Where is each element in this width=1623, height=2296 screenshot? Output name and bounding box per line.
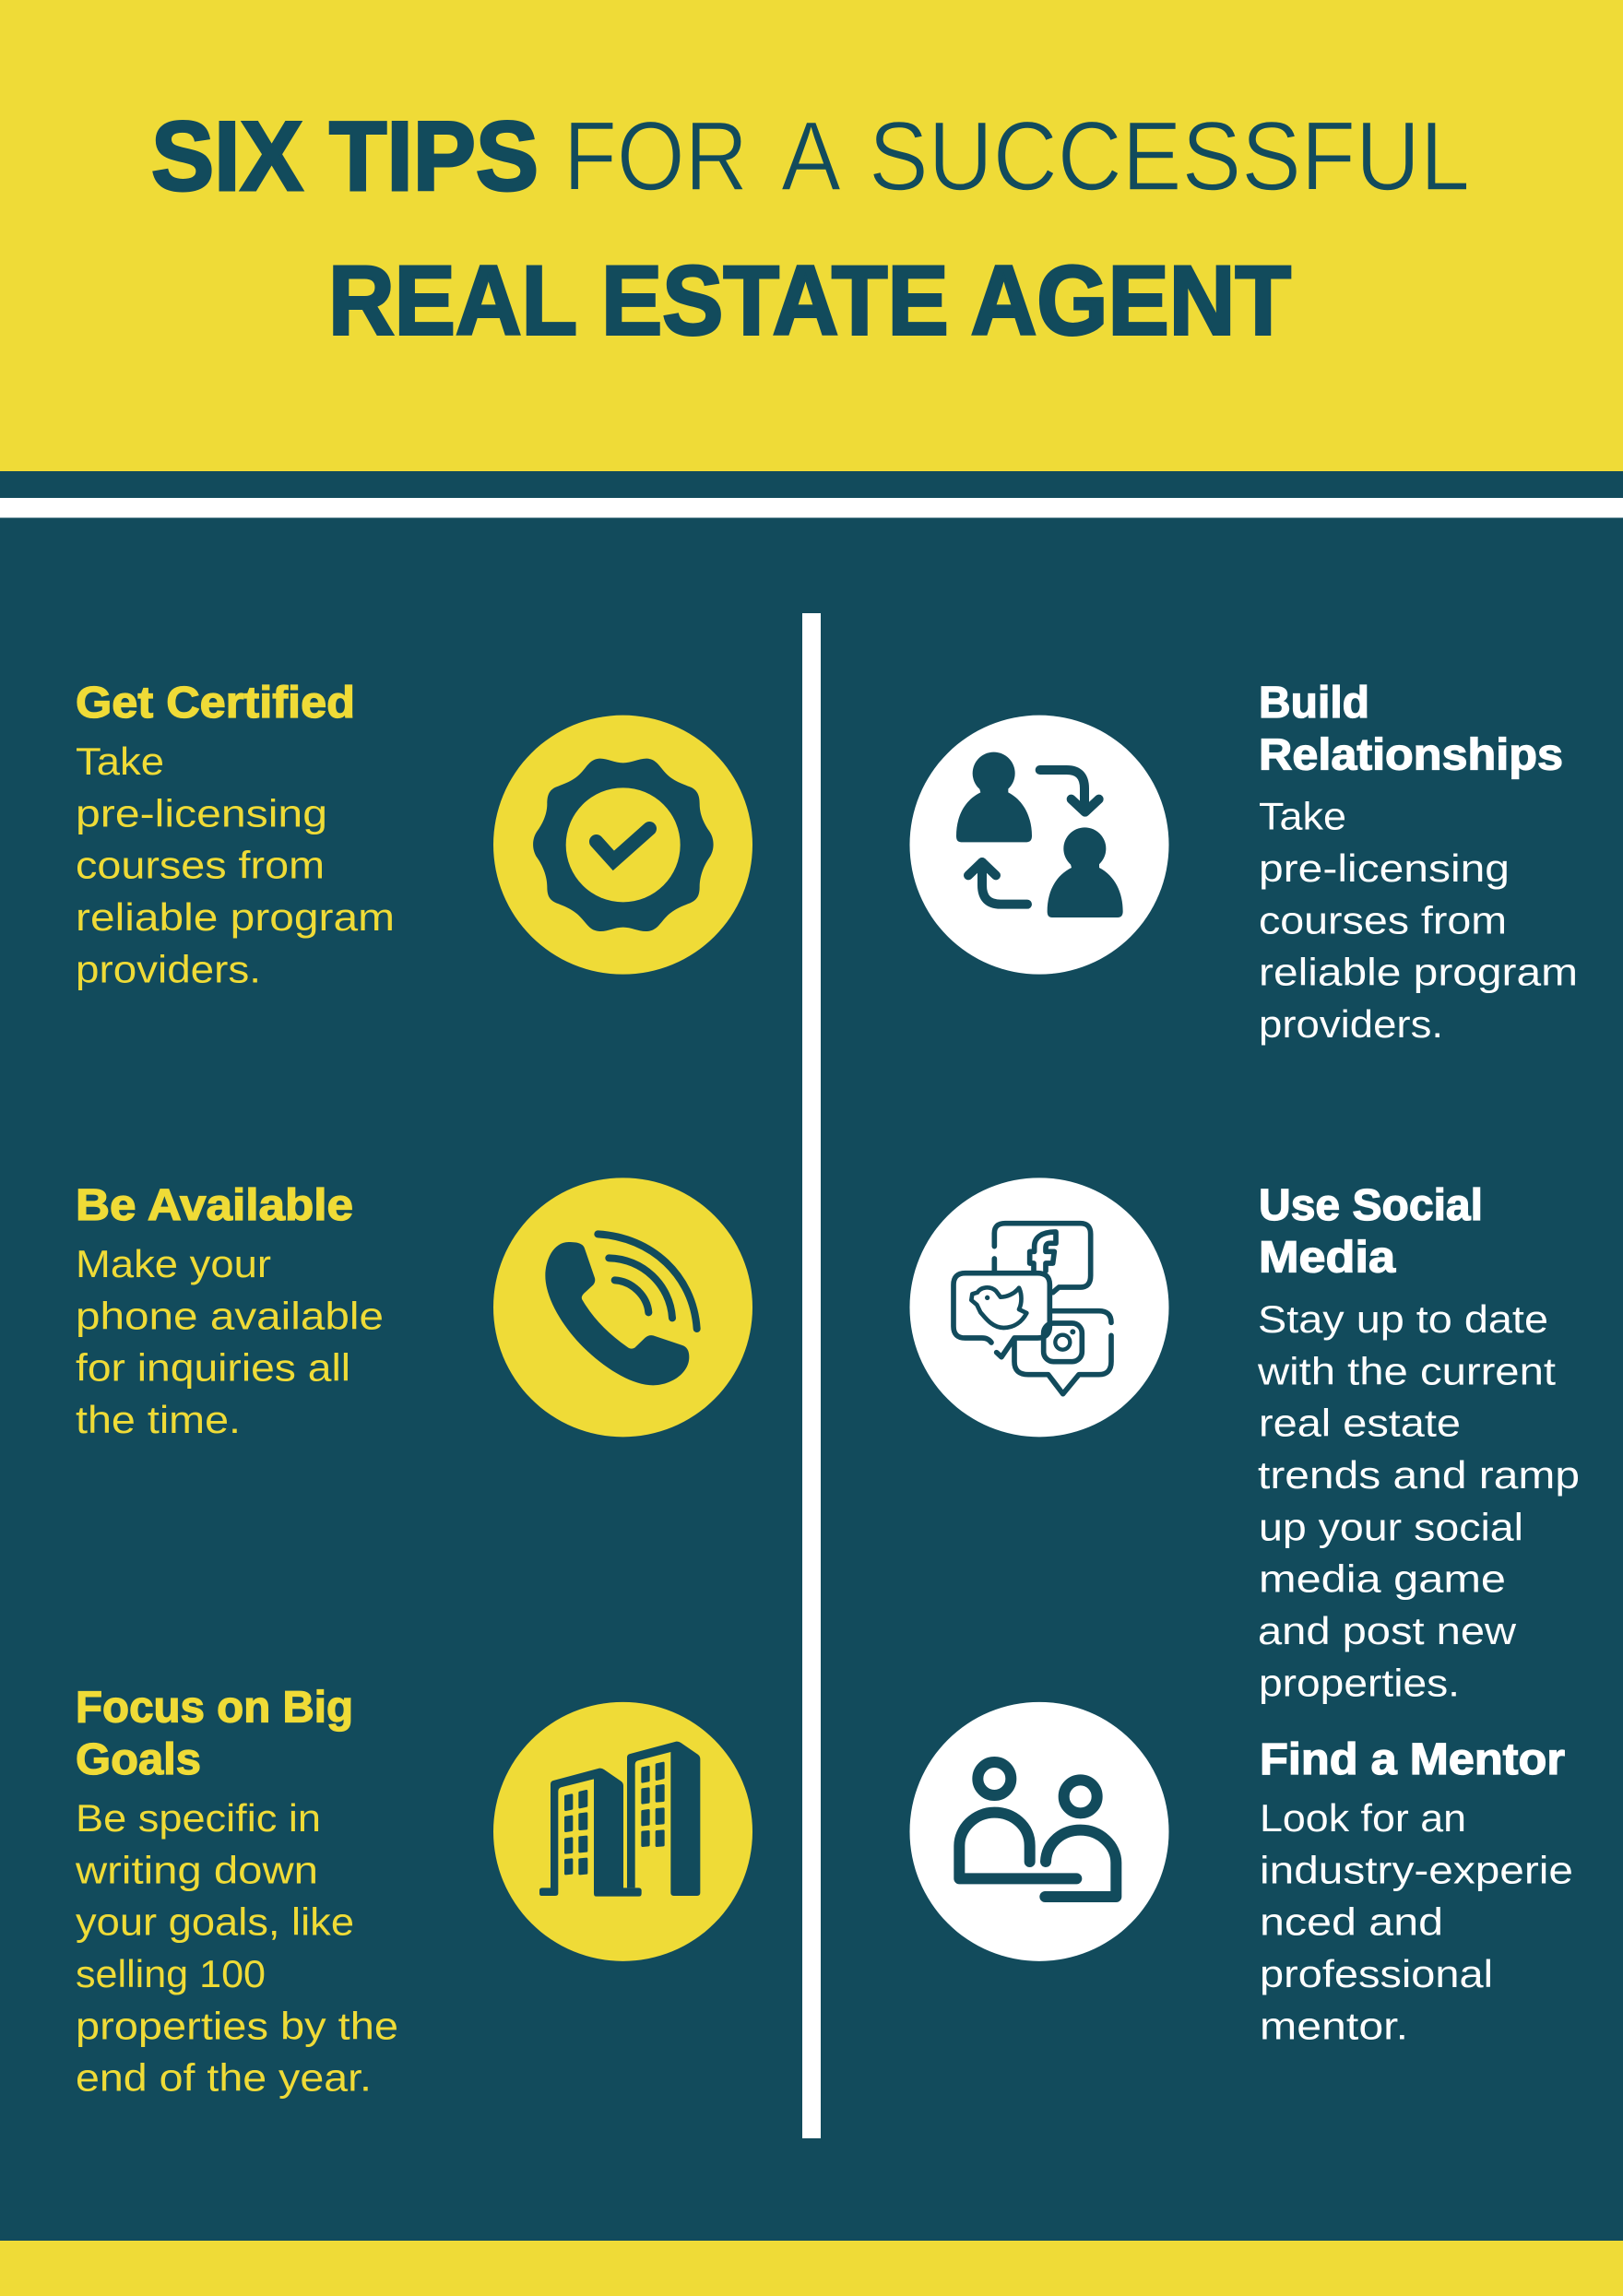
body: Use Social Media: properties. — [1259, 1661, 1460, 1704]
body: Find a Mentor — [1260, 1796, 1573, 2047]
body: Get Certified: reliable program — [76, 895, 395, 939]
heading: Focus on Big Goals: Focus on Big — [76, 1684, 353, 1733]
body: Build Relationships — [1259, 795, 1578, 1046]
body: Focus on Big Goals: your goals, like — [76, 1900, 354, 1944]
tip: Focus on Big Goals — [75, 1684, 398, 2100]
body: Be Available: phone available — [76, 1294, 384, 1337]
body: Get Certified: pre-licensing — [76, 791, 327, 834]
heading: Use Social Media — [1259, 1181, 1483, 1282]
white stripe — [0, 498, 1623, 518]
body: Build Relationships: pre-licensing — [1259, 846, 1510, 890]
body: Build Relationships: courses from — [1259, 898, 1507, 941]
body: Get Certified: Take — [76, 740, 164, 783]
heading: Build Relationships — [1259, 679, 1563, 779]
heading: Be Available: Be Available — [76, 1181, 353, 1230]
body: Use Social Media: media game — [1259, 1557, 1506, 1601]
title — [151, 101, 1470, 356]
body: Get Certified — [76, 740, 395, 990]
heading: Find a Mentor: Find a Mentor — [1260, 1735, 1565, 1784]
body: Find a Mentor: mentor. — [1260, 2004, 1408, 2047]
body: Be Available: Make your — [76, 1242, 271, 1285]
body: Use Social Media: up your social — [1259, 1505, 1523, 1548]
heading: Build Relationships: Relationships — [1259, 730, 1563, 779]
heading: Build Relationships: Build — [1259, 679, 1369, 728]
body: Find a Mentor: industry-experie — [1260, 1848, 1573, 1891]
body: Use Social Media: trends and ramp — [1258, 1453, 1580, 1497]
body: Focus on Big Goals: selling 100 — [76, 1952, 266, 1995]
title: FOR — [563, 101, 748, 211]
icon: social media — [909, 1178, 1168, 1437]
heading: Get Certified: Get Certified — [76, 679, 355, 728]
heading: Use Social Media: Use Social — [1259, 1181, 1483, 1230]
icon: relationships — [909, 716, 1168, 975]
body: Use Social Media: Stay up to date — [1258, 1297, 1548, 1341]
body: Find a Mentor: professional — [1260, 1952, 1493, 1995]
body: Be Available — [76, 1242, 384, 1441]
body: Build Relationships: providers. — [1259, 1002, 1443, 1046]
icon: phone — [493, 1178, 752, 1437]
body: Get Certified: providers. — [76, 947, 261, 990]
title: SUCCESSFUL — [869, 101, 1470, 211]
heading: Focus on Big Goals: Goals — [76, 1735, 201, 1784]
body: Focus on Big Goals: Be specific in — [76, 1796, 321, 1840]
body: Be Available: for inquiries all — [76, 1346, 350, 1390]
body: Use Social Media: and post new — [1258, 1609, 1517, 1652]
body: Focus on Big Goals: properties by the — [76, 2004, 398, 2047]
icon: mentor — [909, 1702, 1168, 1961]
tip: Be Available — [76, 1181, 384, 1441]
title: REAL ESTATE AGENT — [328, 245, 1291, 356]
body: Use Social Media: with the current — [1257, 1349, 1556, 1392]
center divider — [802, 613, 821, 2138]
body: Use Social Media: real estate — [1259, 1402, 1461, 1445]
body: Use Social Media — [1257, 1297, 1580, 1704]
tip: Use Social Media — [1257, 1181, 1580, 1704]
body: Be Available: the time. — [76, 1398, 241, 1441]
body: Build Relationships: reliable program — [1259, 951, 1578, 994]
footer band — [0, 2241, 1623, 2296]
body: Find a Mentor: Look for an — [1260, 1796, 1466, 1840]
body: Get Certified: courses from — [76, 844, 325, 887]
title: A — [781, 101, 842, 211]
tip: Find a Mentor — [1260, 1735, 1573, 2047]
body: Focus on Big Goals: writing down — [75, 1848, 318, 1891]
icon: certified badge — [493, 716, 752, 975]
body: Build Relationships: Take — [1259, 795, 1346, 838]
title: SIX TIPS — [151, 101, 539, 211]
body: Find a Mentor: nced and — [1260, 1900, 1443, 1944]
body: Focus on Big Goals — [75, 1796, 398, 2100]
tip: Build Relationships — [1259, 679, 1578, 1046]
header band — [0, 0, 1623, 471]
body: Focus on Big Goals: end of the year. — [76, 2056, 372, 2100]
tip: Get Certified — [76, 679, 395, 990]
icon: buildings — [493, 1702, 752, 1961]
heading: Focus on Big Goals — [76, 1684, 353, 1784]
heading: Use Social Media: Media — [1259, 1234, 1395, 1282]
